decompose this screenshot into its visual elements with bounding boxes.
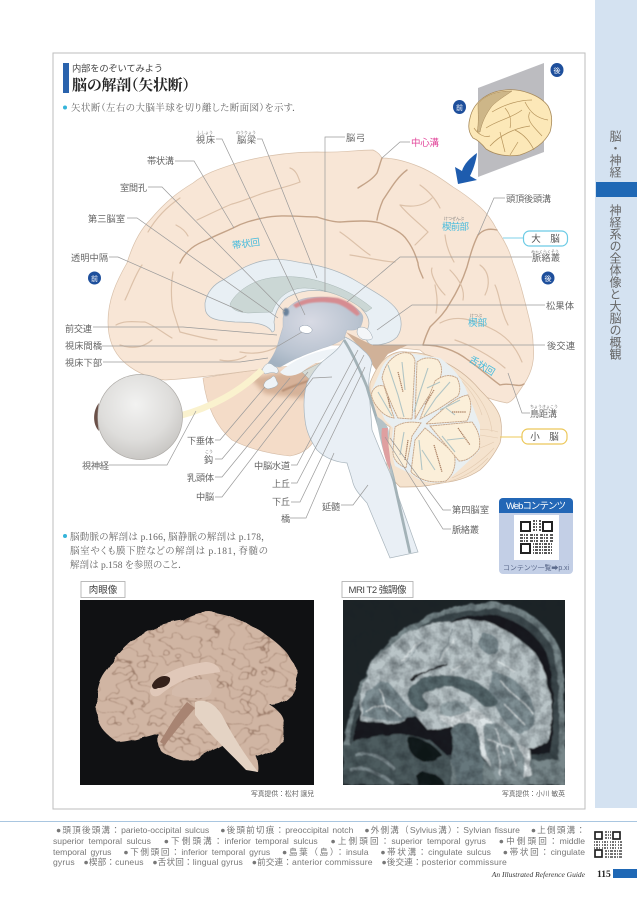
label 松果体: 松果体 xyxy=(546,300,574,311)
pineal xyxy=(357,327,372,340)
brain silhouette xyxy=(96,612,297,772)
intro text: 矢状断（左右の大脳半球を切り離した断面図）を示す． xyxy=(71,102,297,114)
web content box xyxy=(499,498,573,574)
photo credits: 写真提供：松村 譲兒 xyxy=(251,789,314,798)
callosum and midline xyxy=(150,662,258,772)
cerebellum xyxy=(370,352,502,487)
label 鈎: 鈎 xyxy=(204,454,213,465)
label 楔前部: 楔前部 xyxy=(442,221,469,233)
label 乳頭体: 乳頭体 xyxy=(187,472,214,483)
label box 小脳: 小 脳 xyxy=(530,431,559,443)
cortex sulci xyxy=(365,640,534,725)
label 視床間橋: 視床間橋 xyxy=(65,340,102,351)
badge: front xyxy=(88,272,101,284)
diencephalon xyxy=(268,297,363,367)
anatomical illustration xyxy=(93,137,545,558)
photo credits xyxy=(251,789,565,798)
note text: 脳動脈の解剖は p.166，脳静脈の解剖は p.178， xyxy=(70,531,266,543)
badge: back: 後 xyxy=(544,274,552,283)
badge: front: 前 xyxy=(456,103,463,112)
QR code xyxy=(520,521,553,553)
label 脈絡叢 lower: 脈絡叢 xyxy=(452,524,479,535)
dark fissures xyxy=(400,625,472,665)
web content box: コンテンツ一覧➡p.xi xyxy=(503,563,569,572)
label 脳梁: 脳梁 xyxy=(237,134,256,145)
badge: back xyxy=(542,272,554,284)
page footer: An Illustrated Reference Guide xyxy=(491,870,586,879)
label 脈絡叢: 脈絡叢 xyxy=(532,252,560,263)
sulci xyxy=(116,158,524,385)
web content box: Webコンテンツ xyxy=(506,501,566,512)
label 中脳: 中脳 xyxy=(196,491,214,502)
heading: 脳の解剖（矢状断） xyxy=(72,76,190,94)
label box 大脳: 大 脳 xyxy=(531,233,560,245)
sidebar xyxy=(595,0,637,808)
note text: 脳室やくも膜下腔などの解剖は p.181，脊髄の xyxy=(70,545,268,557)
thalamus dark spot xyxy=(283,308,289,316)
fornix red band xyxy=(293,297,360,316)
photo credits: 写真提供：小川 敏英 xyxy=(502,789,565,798)
label 第三脳室: 第三脳室 xyxy=(88,213,125,224)
MRI mottling xyxy=(343,600,565,785)
arrow xyxy=(455,153,477,184)
brain xyxy=(360,621,552,749)
ruby ししょう: ししょう xyxy=(197,129,213,135)
footer rule xyxy=(0,821,637,822)
label 下垂体: 下垂体 xyxy=(187,435,214,446)
label 延髄: 延髄 xyxy=(322,501,340,512)
interventricular foramen xyxy=(300,325,312,333)
section plane xyxy=(478,63,544,177)
footer glossary: gyrus ●楔部：cuneus ●舌状回：lingual gyrus ●前交連：anterior commissure ●後交連：posterior commissure xyxy=(53,857,507,867)
cerebral aqueduct and fourth ventricle strip xyxy=(344,340,410,553)
label 頭頂後頭溝: 頭頂後頭溝 xyxy=(506,193,551,204)
brown temporal crease xyxy=(282,378,318,391)
badge: back: 後 xyxy=(554,66,560,75)
sidebar text: section: 神経系の全体像と大脳の概観 xyxy=(608,203,622,360)
temporal shading xyxy=(250,364,335,398)
label 上丘: 上丘 xyxy=(272,479,290,489)
inset: brain section orientation xyxy=(453,63,564,184)
label box 小脳 xyxy=(522,429,567,444)
ruby けつぶ: けつぶ xyxy=(470,312,482,318)
scalp xyxy=(343,602,565,785)
cerebrum xyxy=(108,150,534,403)
septum and lateral ventricle xyxy=(230,277,372,313)
label box 大脳 xyxy=(524,231,568,246)
ruby のうりょう: のうりょう xyxy=(236,129,256,135)
label 帯状溝: 帯状溝 xyxy=(147,155,174,166)
photo: gross brain xyxy=(80,600,314,785)
label 室間孔: 室間孔 xyxy=(120,182,147,193)
label 視床: 視床 xyxy=(196,134,215,145)
footer QR code xyxy=(594,832,622,857)
ruby こう: こう xyxy=(205,448,213,454)
CSF xyxy=(440,704,532,780)
eye xyxy=(94,374,182,460)
brainstem xyxy=(451,723,483,785)
label 中脳水道: 中脳水道 xyxy=(254,460,290,471)
label 下丘: 下丘 xyxy=(272,497,290,507)
brainstem xyxy=(304,337,418,558)
label 脳弓: 脳弓 xyxy=(346,132,365,143)
label 視床下部: 視床下部 xyxy=(65,357,102,368)
label 第四脳室: 第四脳室 xyxy=(452,504,489,515)
page footer xyxy=(491,869,637,880)
footer glossary: temporal gyrus ●下側頭回：inferior temporal gyrus ●島葉（島）：insula ●帯状溝：cingulate sulcus ●帯状回：cingulate xyxy=(53,846,585,856)
panel frame xyxy=(53,53,585,809)
label 後交連: 後交連 xyxy=(547,340,575,351)
footer glossary xyxy=(53,825,585,867)
optic nerve xyxy=(179,370,262,416)
label 視神経: 視神経 xyxy=(82,460,109,471)
label 鳥距溝: 鳥距溝 xyxy=(530,408,557,419)
ventricle hole xyxy=(152,676,170,689)
photo: MRI xyxy=(343,600,565,785)
corpus callosum xyxy=(205,259,401,345)
skull base xyxy=(343,735,452,785)
thalamus xyxy=(440,701,470,716)
photo label: gross xyxy=(81,582,125,598)
callosum sulcus xyxy=(410,665,448,680)
midbrain tegmentum xyxy=(302,360,332,384)
note text xyxy=(63,531,268,571)
ruby みゃくらくそう: みゃくらくそう xyxy=(531,248,559,254)
footer glossary: superior temporal sulcus ●下側頭溝：inferior temporal sulcus ●上側頭回：superior temporal gyrus ●中側頭回：middle xyxy=(53,836,585,846)
corpus callosum xyxy=(407,675,498,712)
ruby けつぜんぶ: けつぜんぶ xyxy=(444,215,464,221)
ruby ちょうきょこう: ちょうきょこう xyxy=(530,403,558,409)
label 舌状回: 舌状回 xyxy=(467,353,497,379)
hypothalamic hollow xyxy=(280,348,345,376)
heading: 内部をのぞいてみよう xyxy=(72,62,163,74)
small brain xyxy=(469,90,552,156)
temporal lobe xyxy=(203,362,340,456)
photo label: gross: 肉眼像 xyxy=(89,584,118,596)
gray cortex patches xyxy=(362,632,535,735)
label 橋: 橋 xyxy=(281,513,290,524)
badge: front: 前 xyxy=(91,274,98,283)
label 帯状回: 帯状回 xyxy=(231,236,261,252)
leader lines xyxy=(93,137,545,529)
label 楔部: 楔部 xyxy=(468,317,487,329)
sidebar text: category: 脳・神経 xyxy=(608,130,622,179)
page footer: 115 xyxy=(597,870,611,880)
photo label: MRI: MRI T2 強調像 xyxy=(348,584,407,596)
heading xyxy=(63,62,190,94)
optic chiasm and pituitary xyxy=(262,363,278,389)
photo label: MRI xyxy=(342,582,413,598)
cerebellum xyxy=(484,722,525,782)
footer glossary: ●頭頂後頭溝：parieto-occipital sulcus ●後頭前切痕：preoccipital notch ●外側溝（Sylvius溝）：Sylvian fissure ●上側頭溝： xyxy=(56,825,585,835)
note text: 解剖は p.158 を参照のこと． xyxy=(70,559,183,571)
anatomical labels xyxy=(65,129,575,535)
label 透明中隔: 透明中隔 xyxy=(71,252,108,263)
label 前交連: 前交連 xyxy=(65,323,92,334)
label 中心溝: 中心溝 xyxy=(411,137,439,149)
tentorium brown xyxy=(346,332,408,370)
